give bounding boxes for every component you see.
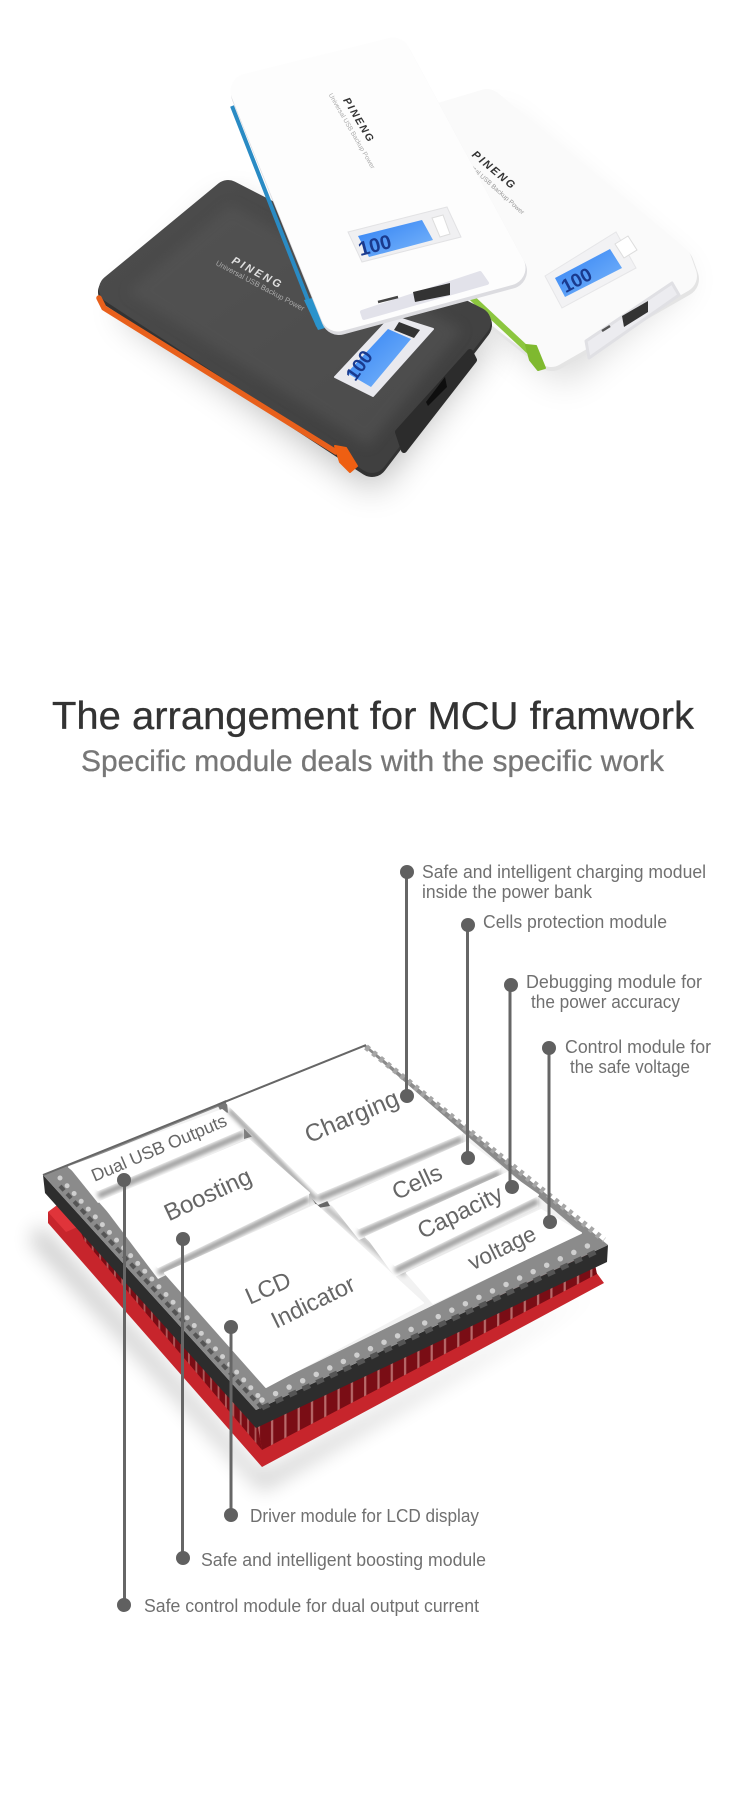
dark gaps between modules xyxy=(217,1100,405,1275)
module: voltage xyxy=(407,1210,581,1303)
module: Cells: Cells xyxy=(388,1159,446,1205)
brand: PINENG xyxy=(469,149,519,193)
chip shadow xyxy=(30,1225,600,1490)
red pin band: left xyxy=(70,1205,262,1450)
module: LCD Indicator: Indicator xyxy=(267,1270,359,1333)
USB port xyxy=(622,301,648,327)
callout: capacity xyxy=(504,971,702,1194)
callout: capacity: Debugging module for xyxy=(526,971,702,992)
LCD reading: 100 xyxy=(342,347,378,385)
power button xyxy=(615,236,637,258)
power button xyxy=(432,215,450,237)
module: Dual USB Outputs: Dual USB Outputs xyxy=(88,1110,230,1186)
brand: PINENG xyxy=(230,255,285,292)
green trim xyxy=(471,297,530,352)
pin heads left xyxy=(60,1178,262,1400)
callout: charging: Safe and intelligent charging moduel xyxy=(422,861,706,882)
LCD screen xyxy=(347,329,411,387)
module: Capacity xyxy=(366,1173,538,1277)
pin stems front xyxy=(262,1250,600,1408)
callout: boosting: Safe and intelligent boosting module xyxy=(201,1549,486,1570)
pin stems left xyxy=(60,1186,262,1408)
module: Cells xyxy=(330,1142,500,1240)
module: Capacity: Capacity xyxy=(413,1180,507,1244)
chip stack diagram xyxy=(30,1045,608,1490)
side ports xyxy=(398,352,474,450)
micro port xyxy=(378,297,398,302)
pin row: back right xyxy=(366,1047,604,1240)
USB port xyxy=(413,283,450,302)
module: Boosting: Boosting xyxy=(160,1163,256,1227)
shadows under power banks xyxy=(120,110,690,490)
module: voltage: voltage xyxy=(464,1221,540,1275)
button xyxy=(394,322,420,338)
LCD reading: 100 xyxy=(558,264,596,298)
module: Charging: Charging xyxy=(301,1085,403,1149)
module: LCD Indicator xyxy=(165,1205,423,1387)
LCD frame xyxy=(545,232,636,308)
USB port side xyxy=(426,377,447,406)
power bank: white with blue trim xyxy=(232,55,509,330)
red pin band: front xyxy=(256,1250,597,1450)
module: Boosting xyxy=(100,1140,309,1279)
module: Dual USB Outputs xyxy=(69,1110,244,1203)
pin row: back left xyxy=(43,1045,366,1175)
port panel xyxy=(586,283,679,358)
callout: LCD driver xyxy=(224,1320,480,1526)
callout: voltage: the safe voltage xyxy=(570,1056,690,1077)
product photo: three power banks xyxy=(99,55,690,490)
brand: PINENG xyxy=(340,95,377,145)
LCD frame xyxy=(348,207,461,262)
port panel xyxy=(362,273,487,318)
orange trim xyxy=(99,298,336,452)
power bank: dark with orange trim xyxy=(99,195,476,472)
callout: charging xyxy=(400,861,706,1103)
module: LCD Indicator: LCD xyxy=(241,1267,295,1309)
callout: capacity: the power accuracy xyxy=(531,991,681,1012)
callout: charging: inside the power bank xyxy=(422,881,593,902)
callout: voltage: Control module for xyxy=(565,1036,711,1057)
power bank: white with green trim xyxy=(440,106,681,370)
callout: LCD driver: Driver module for LCD display xyxy=(250,1505,480,1526)
subtitle: Specific module deals with the specific work xyxy=(81,745,665,778)
micro port xyxy=(602,326,610,331)
title: The arrangement for MCU framwork xyxy=(52,695,695,738)
pin heads front xyxy=(262,1240,600,1400)
LCD screen xyxy=(555,249,622,297)
callout: cells: Cells protection module xyxy=(483,911,667,932)
board top surface xyxy=(43,1045,608,1410)
LCD reading: 100 xyxy=(356,231,394,261)
callout: boosting xyxy=(176,1232,486,1570)
module: Charging xyxy=(227,1048,462,1205)
tagline: Universal USB Backup Power xyxy=(327,92,376,171)
LCD frame xyxy=(335,316,433,396)
LCD screen xyxy=(358,220,433,257)
callout: dual output: Safe control module for dual output current xyxy=(144,1595,479,1616)
callout: cells xyxy=(461,911,667,1165)
tagline: Universal USB Backup Power xyxy=(214,259,307,313)
blue trim xyxy=(232,106,318,326)
black board xyxy=(43,1175,608,1428)
callout: dual output xyxy=(117,1173,479,1616)
red base xyxy=(48,1203,604,1467)
tagline: Universal USB Backup Power xyxy=(457,154,526,217)
callout: voltage xyxy=(542,1036,711,1229)
